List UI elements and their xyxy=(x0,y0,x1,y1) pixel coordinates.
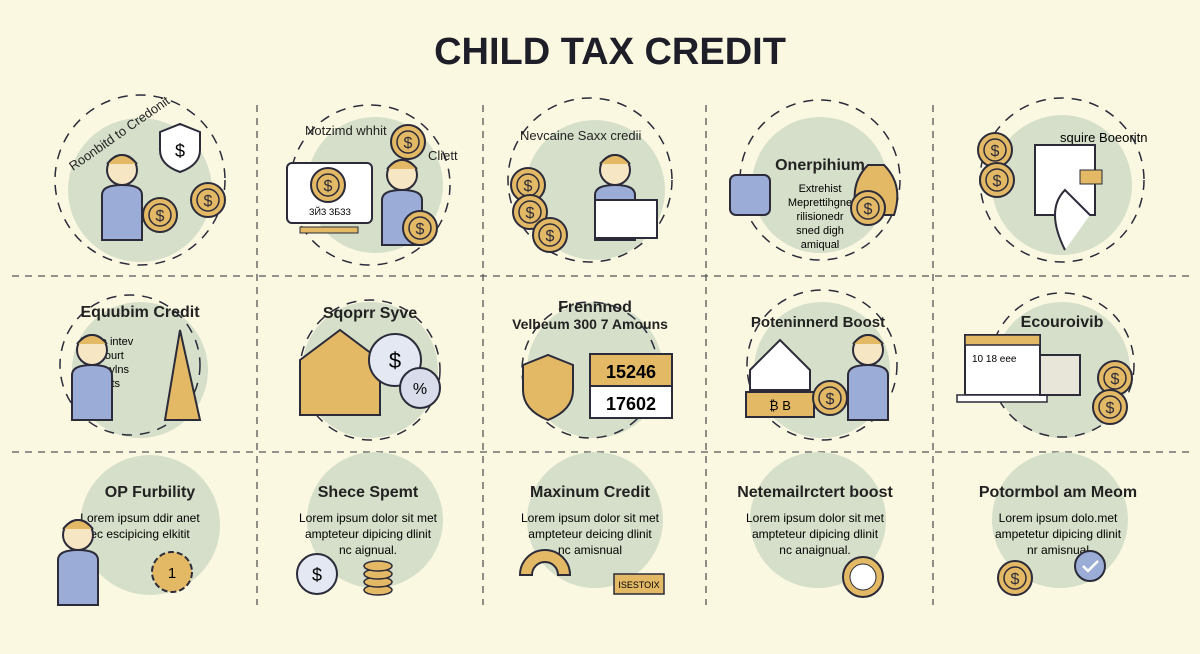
panel: row2 col5: Ecouroivib xyxy=(1021,314,1104,331)
panel: row3 col3: Lorem ipsum dolor sit met xyxy=(521,511,660,525)
title: CHILD TAX CREDIT xyxy=(434,31,786,73)
panel: row2 col2 xyxy=(300,300,440,440)
panel: row2 col5 xyxy=(957,293,1134,438)
panel: row2 col1 xyxy=(60,295,208,438)
panel: row3 col1: 1 xyxy=(168,565,176,582)
panel: row3 col2: Shece Spemt xyxy=(318,484,419,501)
panel: row3 col2: Lorem ipsum dolor sit met xyxy=(299,511,438,525)
panel: row3 col2: $ xyxy=(312,565,322,585)
panel: row2 col3: 17602 xyxy=(606,394,656,414)
panel: row2 col4 xyxy=(746,290,897,440)
panel: row1 col2: ЗЙЗ ЗБЗЗ xyxy=(309,206,351,217)
panel: row3 col3: Maxinum Credit xyxy=(530,484,651,501)
panel: row3 col5: ampetetur dipicing dlinit xyxy=(995,527,1122,541)
panel: row1 col4: amiqual xyxy=(801,239,839,251)
panel: row3 col5: nr amisnual xyxy=(1027,543,1089,557)
panel: row3 col2 xyxy=(297,452,443,595)
panel: row3 col5: Lorem ipsum dolo.met xyxy=(999,511,1118,525)
panel: row3 col1: ec escipicing elkitit xyxy=(90,527,190,541)
panel: row2 col3 xyxy=(512,299,672,438)
panel: row1 col4: Extrehist xyxy=(799,183,841,195)
panel: row2 col1: Equubim Credit xyxy=(80,304,200,321)
panel: row1 col1: Roonbitd to Credonit xyxy=(66,93,173,174)
panel: row1 col3: Nevcaine Saxx credii xyxy=(520,128,641,143)
panel: row3 col1: OP Furbility xyxy=(105,484,195,501)
panel: row3 col3: ISESTOIX xyxy=(618,580,660,590)
panel: row1 col4: Onerpihium xyxy=(775,157,865,174)
panel: row2 col1: eemylns xyxy=(88,364,129,376)
panel: row3 col3: ampteteur deicing dlinit xyxy=(528,527,652,541)
panel: row2 col4: ₿ B xyxy=(769,398,791,413)
panel: row3 col1 xyxy=(58,455,220,605)
panel: row2 col1: slints xyxy=(95,378,121,390)
panel: row1 col2: Notzimd whhit xyxy=(305,123,387,138)
panel: row2 col2: $ xyxy=(389,348,401,373)
panel: row1 col5 xyxy=(978,98,1147,262)
panel: row3 col4: Netemailrctert boost xyxy=(737,484,893,501)
panel: row2 col3: Frennnod xyxy=(558,299,632,316)
panel: row1 col4 xyxy=(730,100,900,260)
panel: row3 col4 xyxy=(737,452,893,597)
panel: row3 col5: Potormbol am Meom xyxy=(979,484,1137,501)
panel: row1 col1 xyxy=(55,93,225,265)
panel: row1 col1: $ xyxy=(175,141,185,161)
panel: row1 col4: rilisionedr xyxy=(796,211,844,223)
panel: row1 col2 xyxy=(287,105,458,265)
panel: row2 col4: Poteninnerd Boost xyxy=(751,314,885,331)
panel: row3 col4: ampteteur dipicing dlinit xyxy=(752,527,879,541)
panel: row3 col1: Lorem ipsum ddir anet xyxy=(80,511,200,525)
panel: row3 col5 xyxy=(979,452,1137,595)
panel: row3 col3 xyxy=(520,452,664,594)
panel: row3 col3: nc amisnual xyxy=(558,543,622,557)
panel: row1 col4: sned digh xyxy=(796,225,844,237)
panel: row2 col2: % xyxy=(413,381,427,398)
panel: row3 col2: ampteteur dipicing dlinit xyxy=(305,527,432,541)
panel: row2 col3: 15246 xyxy=(606,362,656,382)
panel: row2 col5: 10 18 eee xyxy=(972,354,1017,365)
panel: row1 col5: squire Boeoritn xyxy=(1060,130,1147,145)
panel: row3 col2: nc aignual. xyxy=(339,543,397,557)
panel: row1 col4: Meprettihgne xyxy=(788,197,852,209)
panel: row2 col1: Welnourt xyxy=(80,350,124,362)
panel: row2 col3: Velbeum 300 7 Amouns xyxy=(512,316,668,332)
panel: row2 col1: Lelue intev xyxy=(80,336,134,348)
panel: row3 col4: nc anaignual. xyxy=(779,543,851,557)
panel: row2 col2: Sqoprr Syve xyxy=(323,305,417,322)
panel: row3 col4: Lorem ipsum dolor sit met xyxy=(746,511,885,525)
panel: row1 col2: Cliett xyxy=(428,148,458,163)
panel: row1 col3 xyxy=(508,98,672,262)
